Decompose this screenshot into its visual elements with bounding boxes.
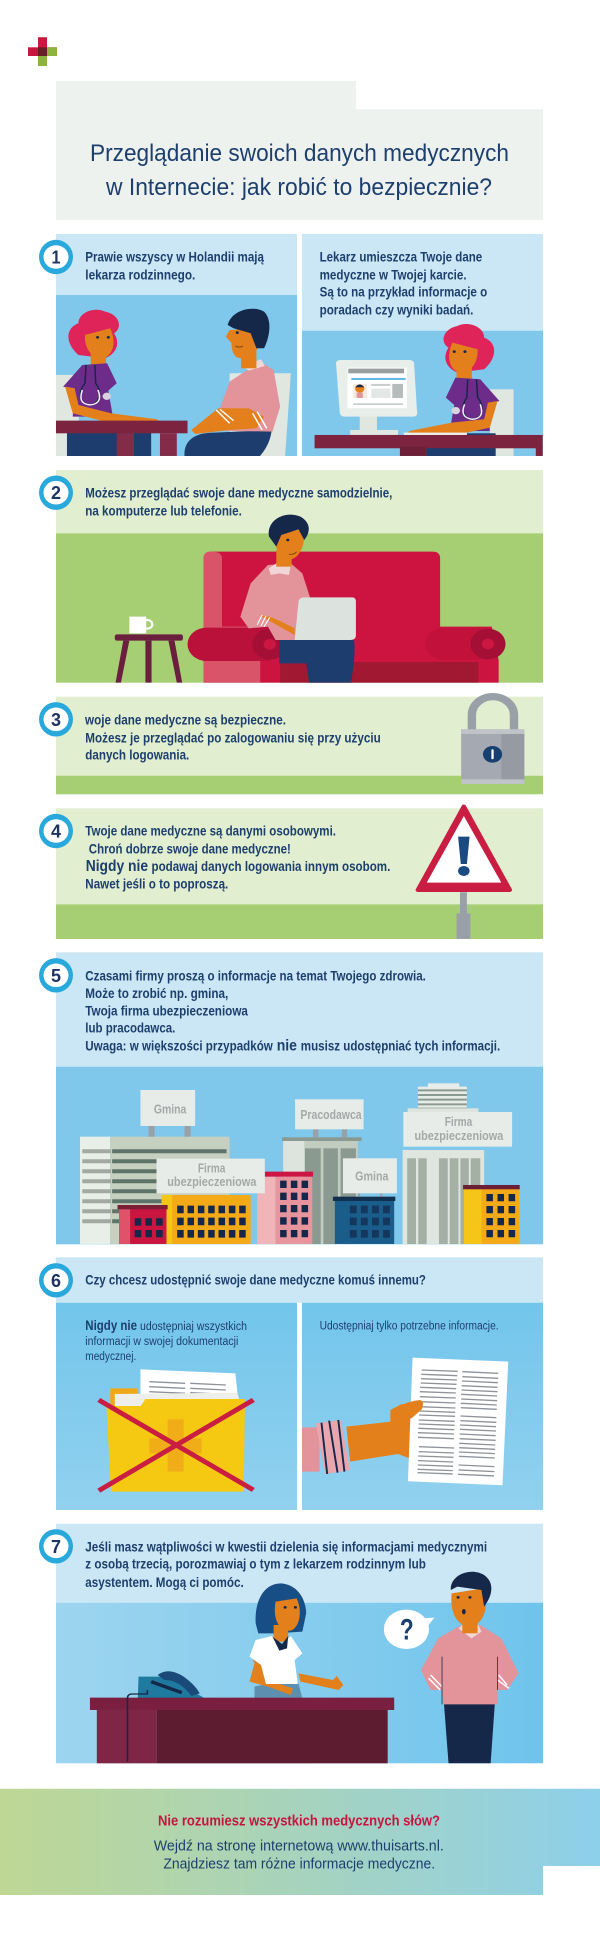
building: blue with sign: Gmina [355,1169,389,1183]
building: red [117,1205,168,1244]
text: never share: udostępniaj wszystkich [140,1321,247,1333]
man with question [421,1572,519,1763]
text: step 1 left: lekarza rodzinnego. [85,266,195,282]
building: yellow with sign [157,1159,265,1244]
building: yellow right [463,1185,520,1244]
text: step 1 right: poradach czy wyniki badań. [320,302,473,318]
illustration: doctor with computer [315,324,543,456]
building: insurance tower: Firma [445,1115,473,1129]
badge 1: 1 [52,248,60,268]
building: insurance tower [403,1083,512,1244]
panel 1 right: doctor at computer [302,234,543,456]
text: step 6: Czy chcesz udostępnić swoje dane medyczne komuś innemu? [85,1272,426,1288]
badge 5 [39,958,73,992]
illustration: hand holding document [302,1358,508,1485]
footer banner [0,1789,600,1895]
panel 6 header: sharing data [56,1257,543,1303]
speech bubble [384,1610,434,1649]
text: step 3: woje dane medyczne są bezpieczne. [84,711,286,727]
text: step 5: Czasami firmy proszą o informacje na temat Twojego zdrowia. [85,968,426,984]
text: step 2: na komputerze lub telefonie. [85,503,242,519]
panel 3: data are safe [56,697,543,794]
text: never share: medycznej. [85,1351,136,1363]
assistant [250,1583,343,1698]
text: step 4: Nigdy nie [86,858,148,875]
panel 5: companies ask for data [56,952,543,1244]
text: step 5: musisz udostępniać tych informacji. [301,1038,500,1054]
text: step 5: Może to zrobić np. gmina, [85,985,228,1001]
building: employer [282,1099,364,1244]
man with laptop [240,515,356,683]
building: pink [257,1172,313,1244]
text: step 1 left: Prawie wszyscy w Holandii mają [85,249,264,265]
text: step 4: podawaj danych logowania innym osobom. [152,858,390,874]
text: step 1 right: Są to na przykład informacje o [320,284,487,300]
text: step 5: nie [277,1038,297,1055]
panel 6 left: never share everything [56,1303,297,1510]
text: step 5: Uwaga: w większości przypadków [85,1038,273,1054]
text: step 7: Jeśli masz wątpliwości w kwestii dzielenia się informacjami medycznymi [85,1539,487,1555]
illustration: doctor and patient [56,309,291,456]
badge 6 [39,1263,73,1298]
icon: warning road sign [418,807,510,939]
panel 4: personal data warning [56,807,543,939]
text: step 5: lub pracodawca. [85,1020,175,1036]
text: step 1 left [85,249,264,282]
text: step 4 [85,823,390,891]
building: municipality [80,1090,230,1244]
illustration: city buildings with signs [80,1083,520,1244]
sofa [188,552,506,683]
text: step 7 [85,1539,487,1590]
icon: computer monitor [336,360,417,435]
text: step 2 [85,485,392,519]
text: step 3: danych logowania. [85,746,189,762]
building: blue with sign [333,1158,397,1244]
title panel [56,81,543,220]
footer text [154,1838,444,1873]
text: step 3: Możesz je przeglądać po zalogowaniu się przy użyciu [85,729,381,745]
text: never share [85,1317,247,1363]
panel 1 left: family doctor [56,234,297,456]
icon: side table with mug [115,617,183,683]
badge 5: 5 [51,966,61,986]
text: share only needed: Udostępniaj tylko potrzebne informacje. [320,1320,499,1332]
badge 2 [39,476,73,510]
badge 4 [39,814,73,848]
building: employer: Pracodawca [300,1108,362,1122]
text: step 4: Twoje dane medyczne są danymi osobowymi. [85,823,336,839]
title: Przeglądanie swoich danych medycznych [90,140,509,167]
text: step 5: Twoja firma ubezpieczeniowa [85,1003,248,1019]
footer text: Wejdź na stronę internetową www.thuisarts.nl. [154,1838,444,1854]
icon: padlock [461,697,524,784]
text: never share: informacji w swojej dokumentacji [85,1336,238,1348]
illustration: assistant, desk and patient [90,1572,519,1763]
text: step 5 [85,968,500,1055]
footer text: Znajdziesz tam różne informacje medyczne. [163,1857,435,1873]
text: step 1 right [320,249,487,318]
building: yellow with sign: ubezpieczeniowa [167,1175,257,1189]
illustration: man on red sofa [115,515,506,683]
title [90,140,509,201]
badge 3 [39,702,73,736]
text: step 1 right: medyczne w Twojej karcie. [320,266,467,282]
text: step 7: z osobą trzecią, porozmawiaj o tym z lekarzem rodzinnym lub [85,1556,426,1572]
title: w Internecie: jak robić to bezpiecznie? [105,174,492,201]
icon: telephone [138,1671,205,1698]
text: step 1 right: Lekarz umieszcza Twoje dane [320,249,482,265]
desk [90,1690,394,1763]
text: step 2: Możesz przeglądać swoje dane medyczne samodzielnie, [85,485,392,501]
badge 7: 7 [51,1537,61,1557]
building: insurance tower: ubezpieczeniowa [414,1129,504,1143]
panel 2: browsing on a laptop [56,470,543,683]
text: step 4: Chroń dobrze swoje dane medyczne! [89,841,291,857]
badge 7 [39,1529,73,1564]
badge 1 [39,240,73,274]
badge 4: 4 [51,822,61,842]
text: step 4: Nawet jeśli o to poproszą. [85,875,228,891]
badge 2: 2 [51,483,61,503]
logo: medical cross [28,37,57,66]
badge 6: 6 [51,1271,61,1291]
badge 3: 3 [51,710,61,730]
text: step 7: asystentem. Mogą ci pomóc. [85,1574,244,1590]
panel 7: talk to your GP [56,1524,543,1763]
footer heading: Nie rozumiesz wszystkich medycznych słów? [158,1813,440,1829]
text: step 3 [84,711,381,762]
speech bubble: ? [400,1612,414,1646]
building: yellow with sign: Firma [198,1161,226,1175]
panel 6 right: share only what is needed [302,1303,543,1510]
icon: crossed out folder [99,1369,253,1492]
building: municipality: Gmina [154,1102,187,1116]
text: never share: Nigdy nie [85,1317,137,1333]
